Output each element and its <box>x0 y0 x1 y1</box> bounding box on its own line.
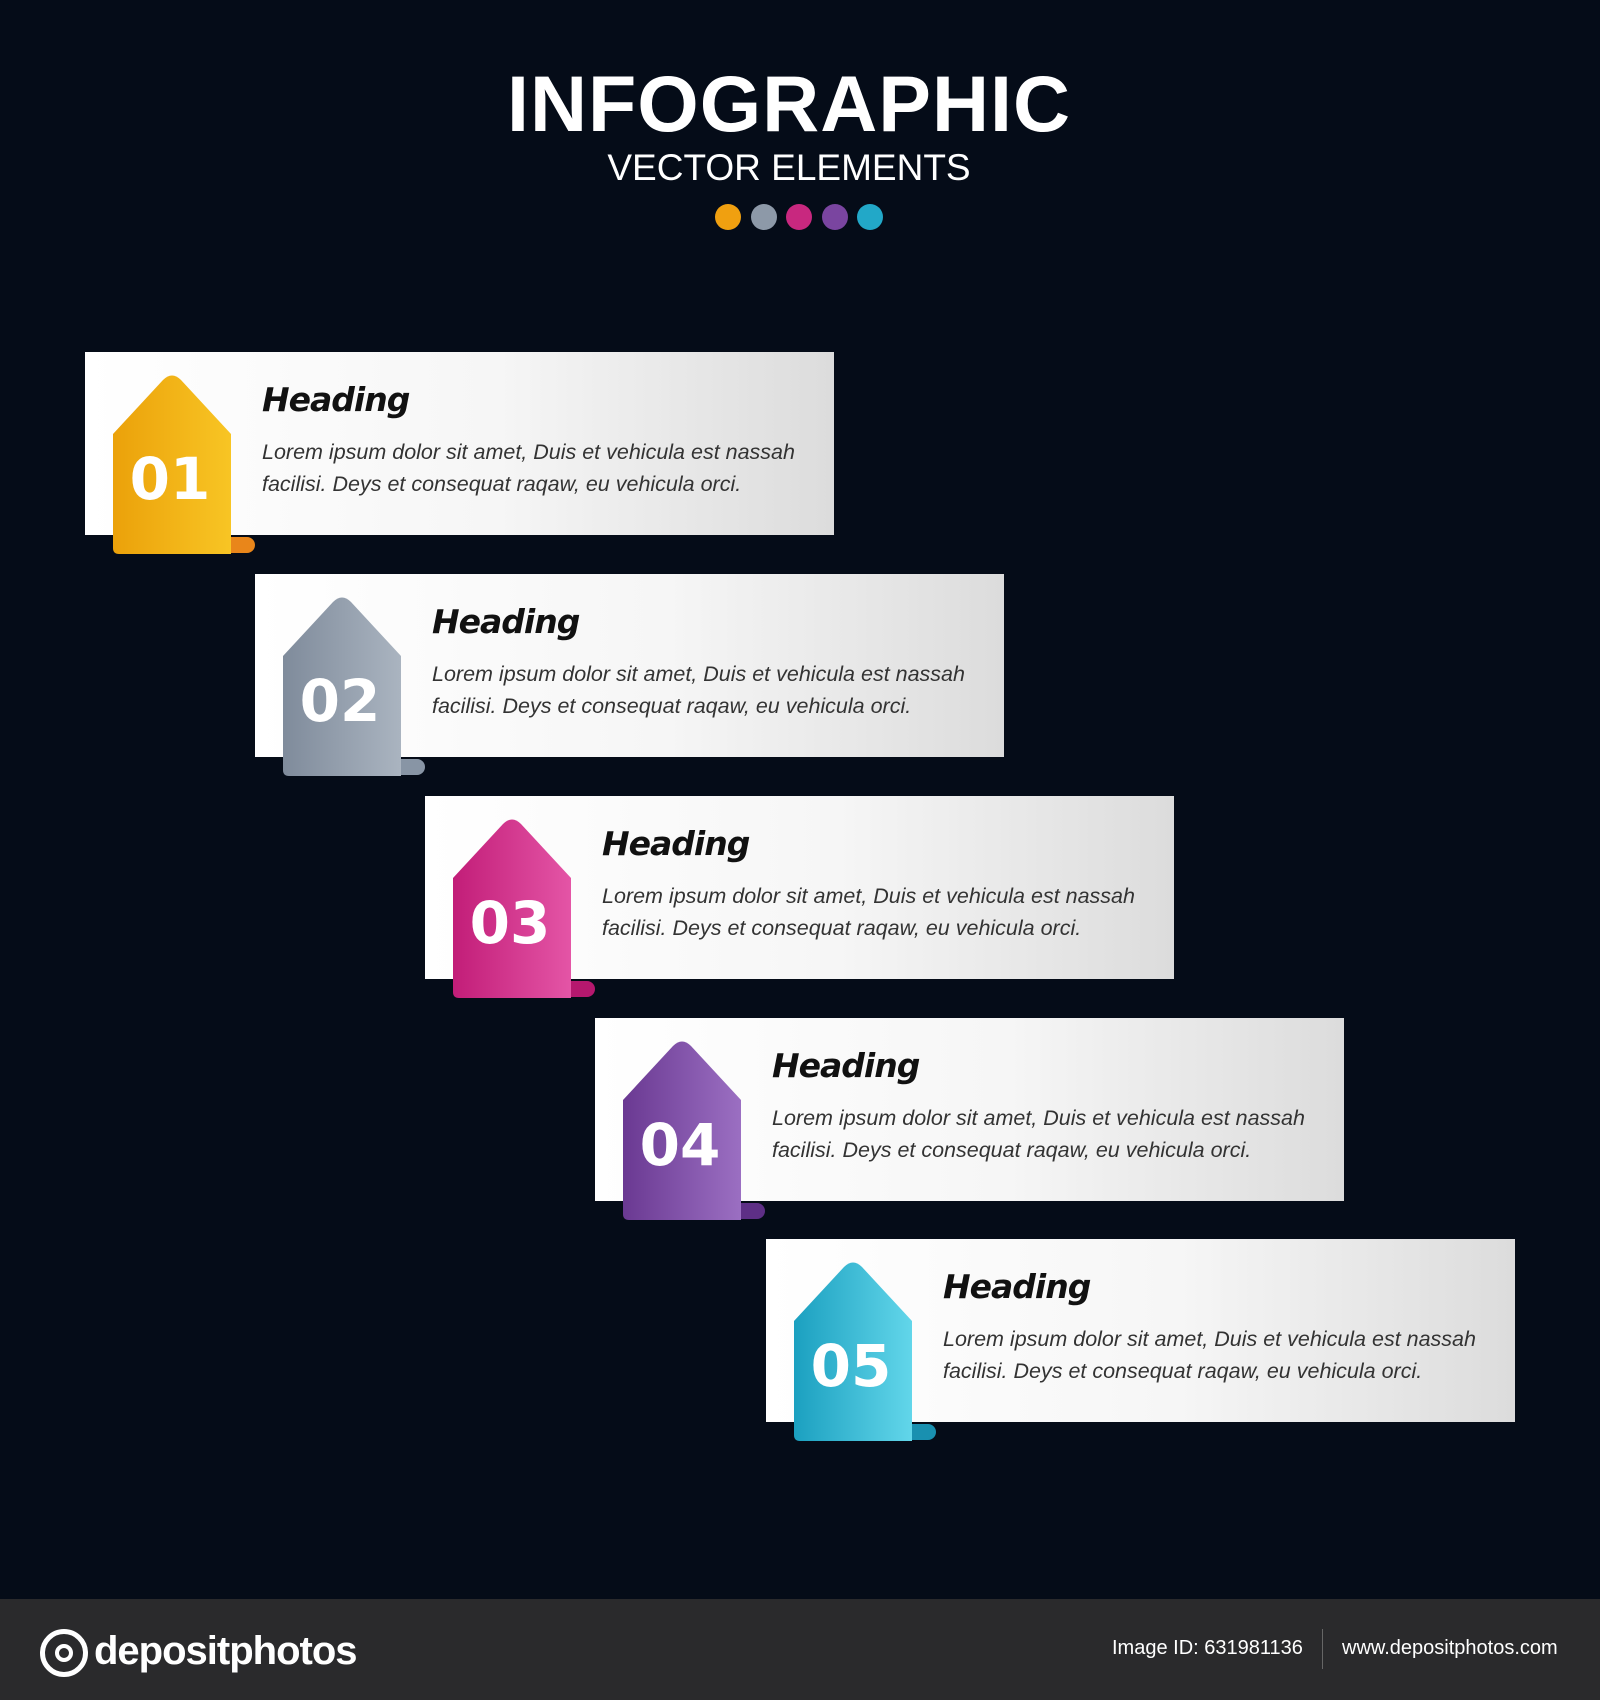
heading: Heading <box>772 1046 919 1085</box>
footer bar <box>0 1599 1600 1700</box>
text: Lorem ipsum dolor sit amet, Duis et vehicula est nassah facilisi. Deys et consequat raqaw, eu vehicula orci. <box>262 440 795 496</box>
heading: Heading <box>943 1267 1090 1306</box>
text: Lorem ipsum dolor sit amet, Duis et vehicula est nassah facilisi. Deys et consequat raqaw, eu vehicula orci. <box>772 1106 1305 1162</box>
panel: step 05 <box>766 1239 1515 1422</box>
icon: tag 03: 03 <box>470 889 550 957</box>
text: Lorem ipsum dolor sit amet, Duis et vehicula est nassah facilisi. Deys et consequat raqaw, eu vehicula orci. <box>602 884 1135 940</box>
color dots <box>715 204 883 230</box>
heading: Heading <box>262 380 409 419</box>
icon: tag 04: 04 <box>640 1111 720 1179</box>
icon: tag 02 <box>283 598 425 776</box>
text: Lorem ipsum dolor sit amet, Duis et vehicula est nassah facilisi. Deys et consequat raqaw, eu vehicula orci. <box>943 1327 1476 1383</box>
icon: tag 04 <box>623 1042 765 1220</box>
subtitle: VECTOR ELEMENTS <box>607 147 971 188</box>
icon: tag 05 <box>794 1262 936 1441</box>
logo: depositphotos <box>94 1629 357 1673</box>
icon: tag 01 <box>113 376 255 554</box>
heading: Heading <box>602 824 749 863</box>
heading: Heading <box>432 602 579 641</box>
image id: Image ID: 631981136 <box>1112 1637 1303 1659</box>
panel: step 03 <box>425 796 1174 979</box>
icon: tag 05: 05 <box>811 1332 891 1400</box>
panel: step 04 <box>595 1018 1344 1201</box>
icon: tag 01: 01 <box>130 445 210 513</box>
text: Lorem ipsum dolor sit amet, Duis et vehicula est nassah facilisi. Deys et consequat raqaw, eu vehicula orci. <box>432 662 965 718</box>
title: INFOGRAPHIC <box>507 59 1071 148</box>
icon: tag 02: 02 <box>300 667 380 735</box>
website: www.depositphotos.com <box>1342 1637 1558 1659</box>
panel: step 01 <box>85 352 834 535</box>
panel: step 02 <box>255 574 1004 757</box>
icon: tag 03 <box>453 820 595 998</box>
